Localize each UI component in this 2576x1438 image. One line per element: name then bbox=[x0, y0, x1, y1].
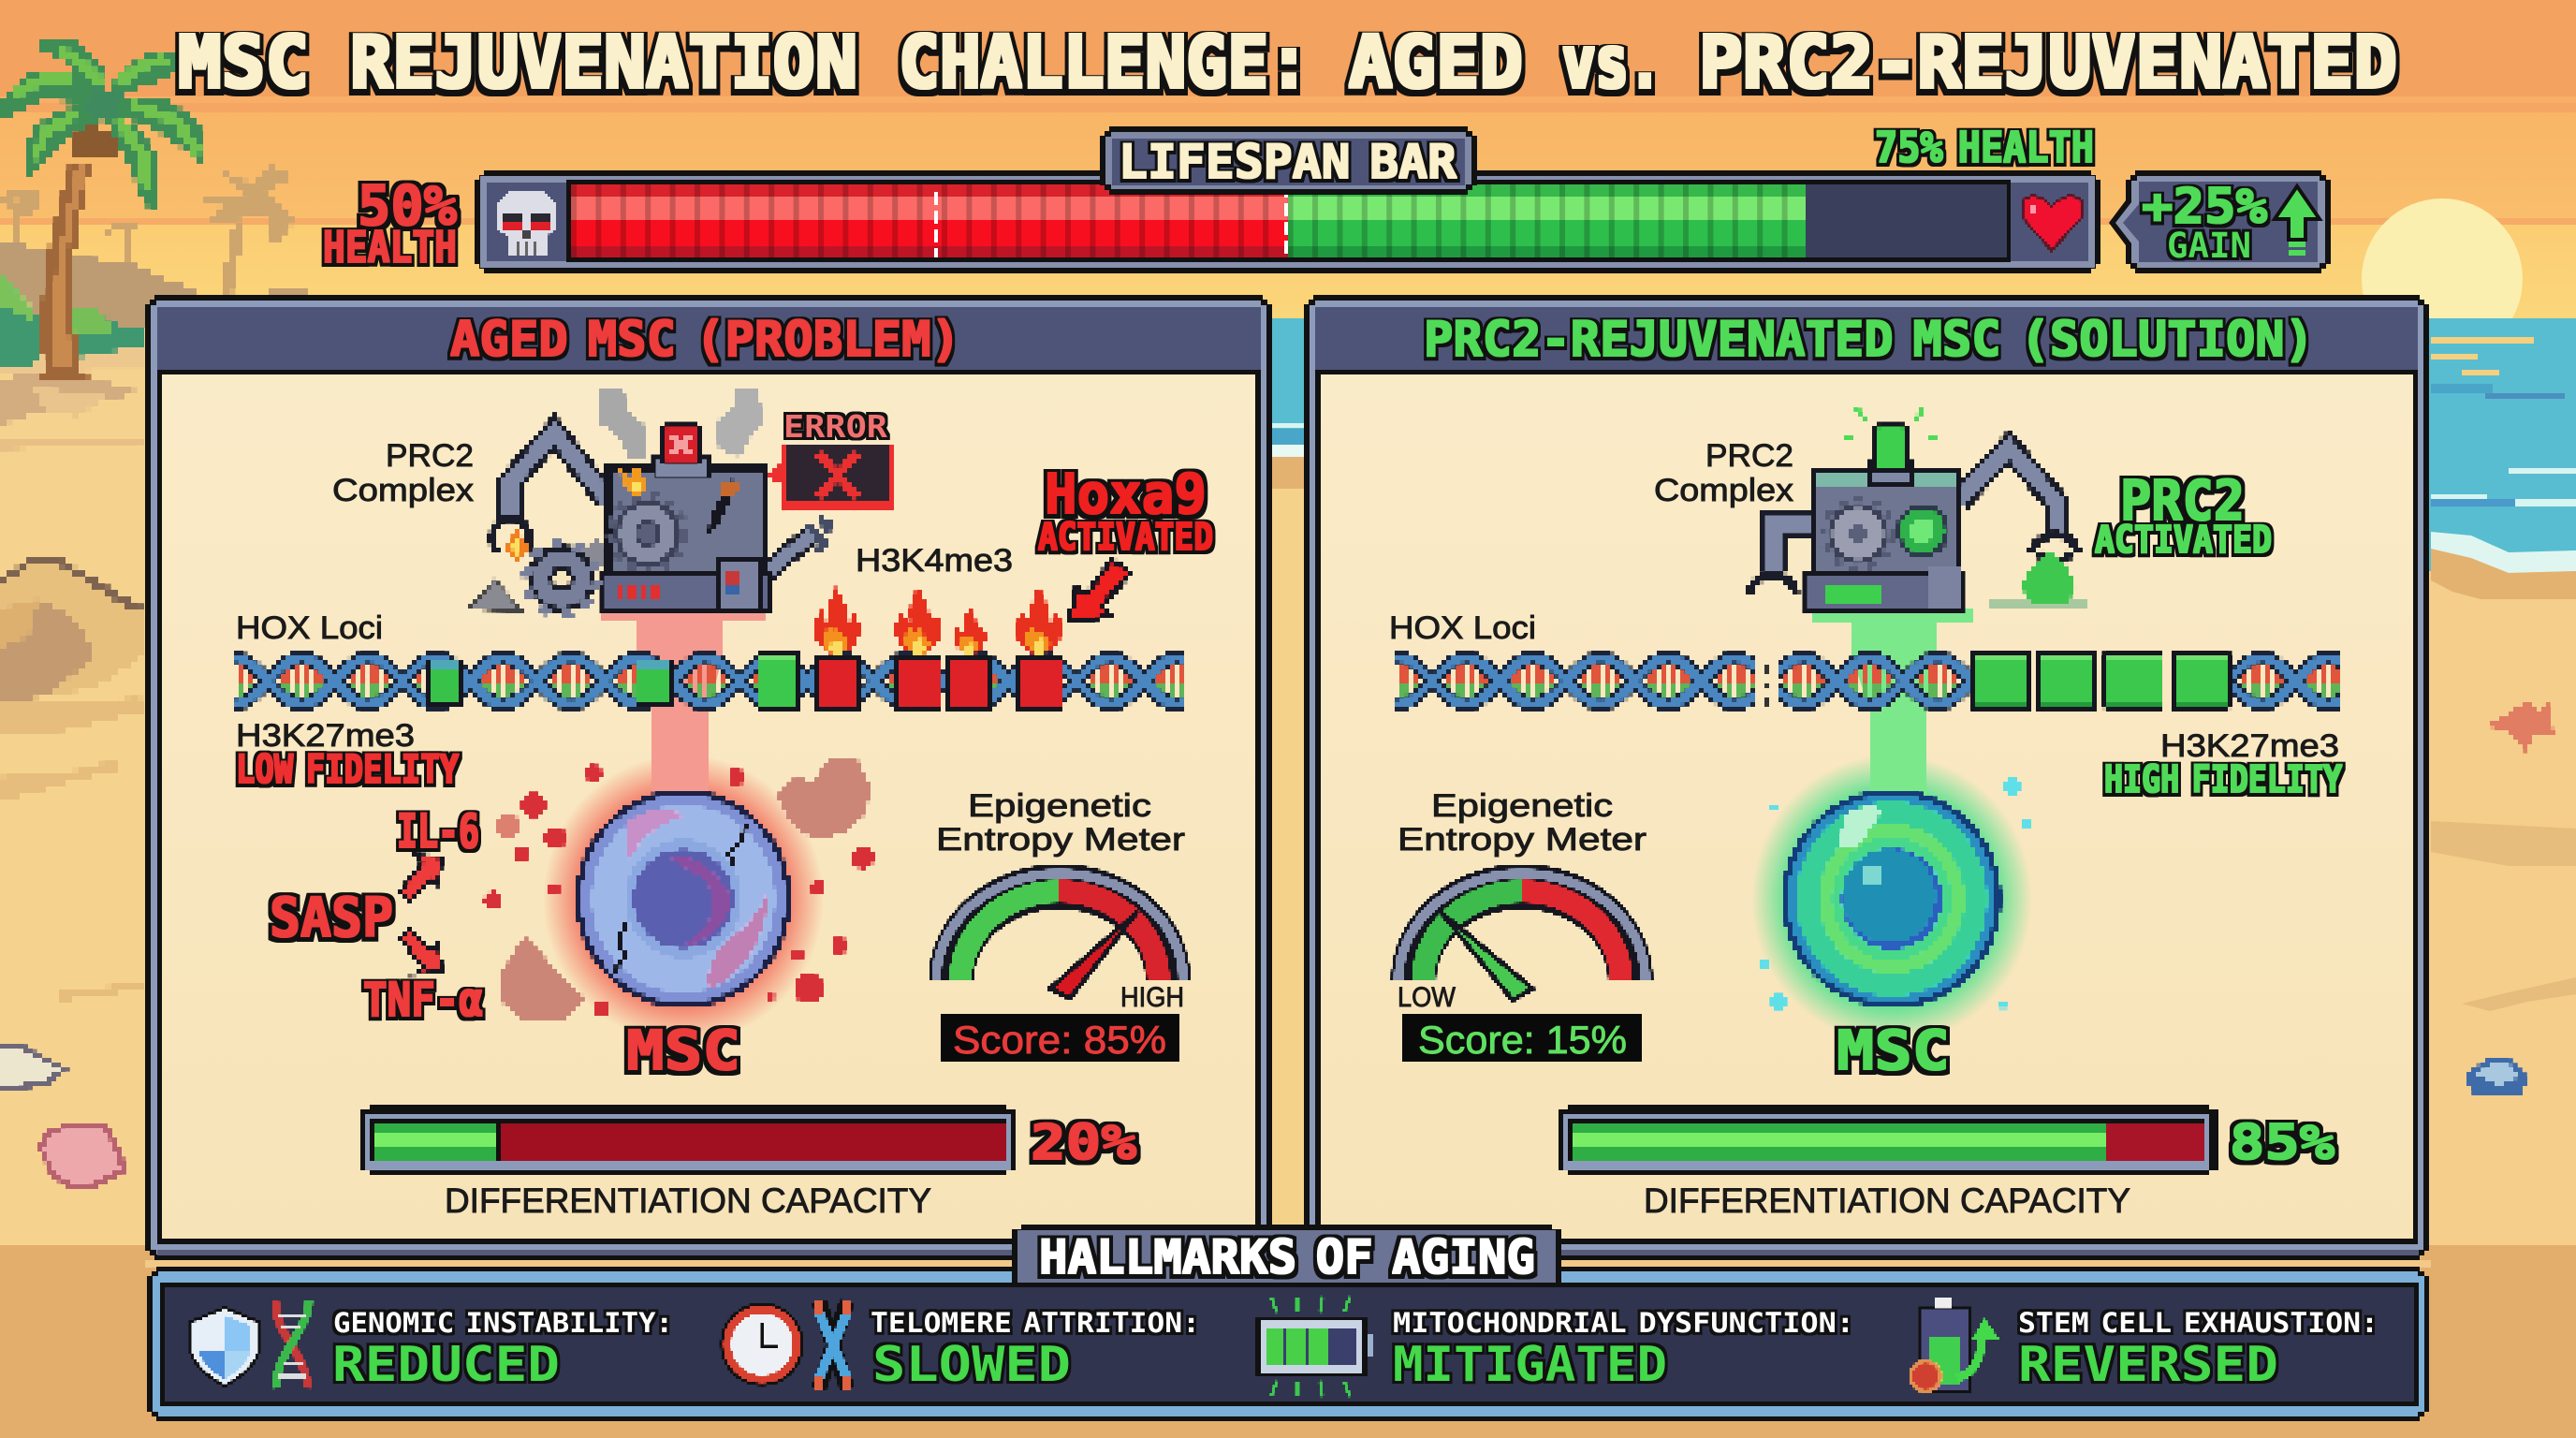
label: PRC2 activated: ACTIVATED bbox=[2095, 519, 2272, 562]
aged MSC cell bbox=[576, 789, 791, 1008]
title: CHALLENGE: bbox=[899, 22, 1310, 105]
glow: aged cell and beam bbox=[543, 609, 824, 1043]
label: lifespan bar: LIFESPAN BAR bbox=[1119, 135, 1457, 189]
text: differentiation capacity aged: DIFFERENTIATION CAPACITY bbox=[445, 1181, 931, 1220]
item: mitochondrial dysfunction bbox=[1256, 1297, 1854, 1397]
label: PRC2 activated: PRC2 bbox=[2120, 468, 2245, 533]
item: mitochondrial dysfunction: MITOCHONDRIAL DYSFUNCTION: bbox=[1393, 1307, 1854, 1339]
label: SASP: TNF-α bbox=[363, 973, 483, 1027]
differentiation bar: aged bbox=[361, 1107, 1017, 1175]
text: entropy meter title aged: Entropy Meter bbox=[936, 822, 1185, 858]
icon: error box bbox=[766, 443, 895, 508]
title: REJUVENATION bbox=[350, 22, 857, 105]
label: hallmarks heading: HALLMARKS OF AGING bbox=[1039, 1230, 1535, 1284]
entropy gauge: aged bbox=[936, 873, 1183, 998]
label: low fidelity: LOW FIDELITY bbox=[236, 746, 460, 792]
SASP debris and particles bbox=[484, 756, 874, 1022]
text: PRC2 complex bbox=[332, 438, 474, 508]
callout: +25% gain: +25% bbox=[2142, 179, 2267, 235]
label: SASP bbox=[270, 804, 483, 1027]
text: entropy meter title right: Entropy Meter bbox=[1398, 822, 1647, 858]
callout: +25% gain bbox=[2109, 170, 2331, 273]
callout: +25% gain: GAIN bbox=[2167, 226, 2251, 266]
title: AGED bbox=[1349, 22, 1523, 105]
panel: aged MSC bbox=[145, 295, 1272, 1260]
arrow: Hoxa9 activated bbox=[1069, 560, 1131, 622]
item: genomic instability: REDUCED bbox=[332, 1337, 560, 1393]
title: vs. bbox=[1562, 22, 1661, 105]
icon: broken PRC2 robot bbox=[468, 387, 831, 614]
label: aged MSC: MSC bbox=[626, 1019, 740, 1082]
heading: aged: AGED MSC (PROBLEM) bbox=[450, 312, 960, 368]
H3K27me3 green markers bbox=[427, 650, 799, 712]
label: lifespan bar bbox=[1100, 126, 1477, 195]
label: 50% health bbox=[323, 173, 457, 272]
text: PRC2 complex right bbox=[1654, 438, 1793, 508]
text: HOX Loci: HOX Loci bbox=[236, 610, 383, 646]
title bbox=[178, 22, 2397, 105]
text: high: HIGH bbox=[1120, 982, 1184, 1013]
icon: up arrow bbox=[2275, 186, 2320, 256]
item: stem cell exhaustion: STEM CELL EXHAUSTION: bbox=[2018, 1307, 2378, 1339]
label: PRC2 activated bbox=[2095, 468, 2272, 562]
heading: rejuvenated: PRC2-REJUVENATED MSC (SOLUTION) bbox=[1424, 312, 2314, 368]
item: mitochondrial dysfunction: MITIGATED bbox=[1393, 1337, 1667, 1393]
label: Hoxa9 activated: ACTIVATED bbox=[1038, 516, 1213, 559]
entropy gauge: rejuvenated bbox=[1398, 873, 1646, 1000]
rejuvenated green segment bbox=[1288, 184, 1806, 257]
text: PRC2 complex: PRC2 bbox=[386, 438, 474, 474]
text: entropy meter title aged bbox=[936, 788, 1185, 858]
label: SASP: IL-6 bbox=[397, 804, 479, 858]
sparkles bbox=[1759, 778, 2033, 1009]
text: H3K4me3: H3K4me3 bbox=[856, 543, 1013, 579]
differentiation bar: rejuvenated bbox=[1558, 1107, 2217, 1175]
icon: healthy PRC2 robot bbox=[1750, 398, 2086, 610]
H3K27me3 green markers bbox=[1971, 650, 2231, 712]
label: SASP: SASP bbox=[270, 886, 393, 949]
icon: chromosome bbox=[814, 1301, 852, 1389]
item: telomere attrition: SLOWED bbox=[872, 1337, 1071, 1393]
icon: shield bbox=[191, 1308, 258, 1386]
item: telomere attrition bbox=[722, 1301, 1200, 1393]
text: entropy meter title right bbox=[1398, 788, 1647, 858]
label: Hoxa9 activated: Hoxa9 bbox=[1045, 462, 1207, 526]
title: MSC bbox=[178, 22, 309, 105]
icon: heart bbox=[2021, 194, 2083, 253]
icon: battery bbox=[1256, 1297, 1374, 1397]
label: 75% health: 75% HEALTH bbox=[1875, 123, 2094, 172]
value: 20%: 20% bbox=[1031, 1115, 1136, 1171]
score: 85%: Score: 85% bbox=[953, 1018, 1166, 1062]
item: genomic instability bbox=[191, 1301, 673, 1393]
label: healthy MSC: MSC bbox=[1837, 1019, 1950, 1082]
label: high fidelity: HIGH FIDELITY bbox=[2104, 758, 2342, 801]
item: stem cell exhaustion: REVERSED bbox=[2018, 1337, 2278, 1393]
text: entropy meter title right: Epigenetic bbox=[1431, 788, 1613, 824]
item: stem cell exhaustion bbox=[1910, 1297, 2378, 1393]
title: PRC2-REJUVENATED bbox=[1699, 22, 2397, 105]
icon: DNA helix bbox=[276, 1301, 309, 1388]
background art: palms and dunes bbox=[0, 39, 309, 1002]
aged red segment bbox=[571, 184, 1288, 257]
label: error: ERROR bbox=[783, 408, 887, 445]
text: HOX Loci right: HOX Loci bbox=[1389, 610, 1536, 646]
icon: clock bbox=[722, 1304, 802, 1385]
score: 15%: Score: 15% bbox=[1418, 1018, 1627, 1062]
beach decorations: shells, starfish, pebble bbox=[0, 700, 2555, 1191]
text: PRC2 complex: Complex bbox=[332, 473, 474, 508]
item: telomere attrition: TELOMERE ATTRITION: bbox=[871, 1307, 1200, 1339]
text: H3K27me3 right: H3K27me3 bbox=[2160, 728, 2339, 764]
item: genomic instability: GENOMIC INSTABILITY: bbox=[333, 1307, 673, 1339]
icon: vial with arrow bbox=[1910, 1297, 2000, 1391]
label: 50% health: HEALTH bbox=[323, 222, 457, 272]
text: differentiation capacity right: DIFFERENTIATION CAPACITY bbox=[1644, 1181, 2130, 1220]
aged panel artwork bbox=[236, 387, 1185, 1175]
text: PRC2 complex right: PRC2 bbox=[1705, 438, 1793, 474]
lifespan bar bbox=[475, 170, 2100, 273]
arrows: SASP to cytokines bbox=[401, 856, 442, 974]
glow: healthy cell and beam bbox=[1751, 609, 2032, 1043]
text: low: LOW bbox=[1398, 982, 1456, 1013]
DNA strand: rejuvenated bbox=[1393, 651, 2339, 712]
DNA strand: aged bbox=[236, 651, 1185, 712]
rejuvenated MSC cell bbox=[1782, 789, 2001, 1008]
panel: hallmarks of aging bbox=[147, 1225, 2429, 1421]
value: 85%: 85% bbox=[2230, 1115, 2334, 1171]
text: PRC2 complex right: Complex bbox=[1654, 473, 1793, 508]
H3K4me3 burning red markers bbox=[813, 584, 1064, 712]
panel: PRC2-rejuvenated MSC bbox=[1304, 295, 2429, 1260]
icon: skull bbox=[496, 190, 556, 255]
text: entropy meter title aged: Epigenetic bbox=[968, 788, 1151, 824]
label: 50% health: 50% bbox=[358, 173, 457, 238]
rejuvenated panel artwork bbox=[1393, 398, 2339, 1175]
label: Hoxa9 activated bbox=[1038, 462, 1213, 559]
text: H3K27me3: H3K27me3 bbox=[236, 718, 415, 754]
